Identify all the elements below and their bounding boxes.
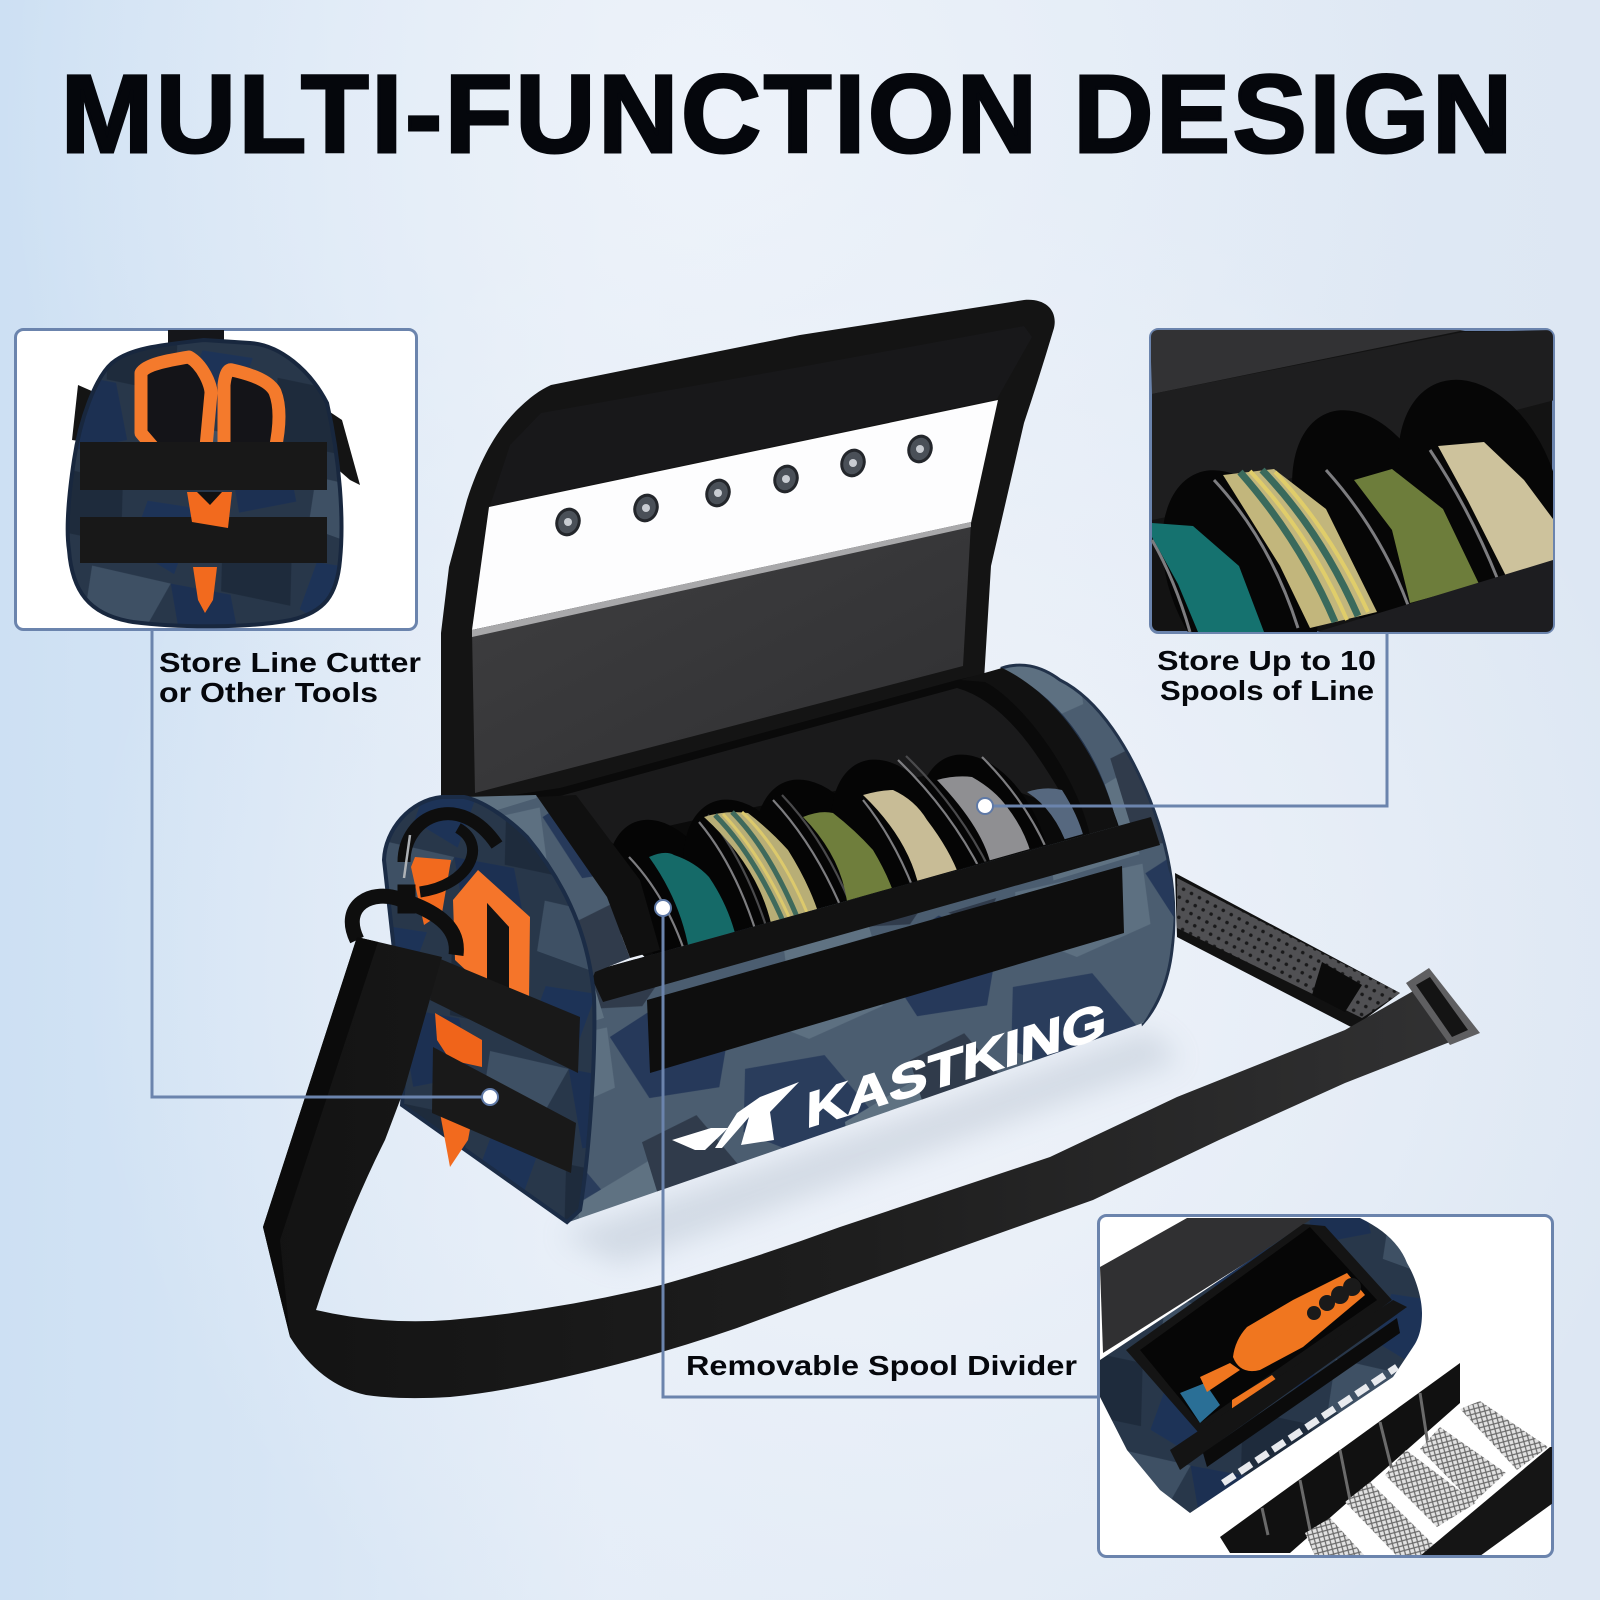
teal spool (649, 853, 736, 950)
label: store up to 10 spools: Store Up to 10 (1157, 645, 1376, 676)
spool flange rings (629, 756, 1047, 950)
beige spool (863, 790, 957, 881)
grey spool (937, 776, 1030, 860)
striped line (1223, 469, 1377, 628)
callout dots (482, 798, 993, 1105)
eyelets (553, 433, 935, 538)
green spool (803, 812, 892, 900)
logo wordmark: KASTKING (806, 992, 1107, 1139)
lip and velcro (1170, 1300, 1407, 1470)
panel: removable divider view (1098, 1216, 1553, 1556)
interior (1126, 1224, 1392, 1440)
right rim band (960, 668, 1118, 835)
logo mark (672, 1082, 799, 1150)
brand logo (672, 992, 1107, 1150)
open lid (441, 300, 1055, 800)
bag floor shadow (560, 1030, 1180, 1265)
right end cap (1002, 665, 1174, 1023)
label: store line cutter: or Other Tools (159, 677, 378, 708)
divider (1220, 1363, 1553, 1556)
green line (1354, 469, 1479, 603)
scissors handles (140, 355, 279, 450)
bag body (1100, 1218, 1422, 1513)
tool holder straps (430, 958, 580, 1173)
side clips (72, 385, 360, 485)
teal line (1152, 523, 1264, 632)
label: store line cutter: Store Line Cutter (159, 647, 421, 678)
line cutter tool (411, 857, 530, 1167)
label: store up to 10 spools: Spools of Line (1160, 675, 1374, 706)
label: removable spool divider: Removable Spool Divider (686, 1350, 1077, 1381)
orange tools (1200, 1273, 1365, 1415)
flanges (1164, 380, 1553, 632)
holder straps (80, 442, 327, 490)
front panel camo (569, 817, 1174, 1222)
main product: fishing line spool bag (263, 300, 1480, 1398)
blade (187, 492, 232, 613)
callout lines (152, 630, 1387, 1397)
spools of line (614, 754, 1083, 946)
blue card (1180, 1383, 1220, 1423)
label: store line cutter (159, 647, 421, 708)
left rim band (536, 795, 660, 958)
title: MULTI-FUNCTION DESIGN (61, 53, 1515, 176)
striped multicolour spool (704, 812, 820, 933)
lid lower inner panel (472, 522, 971, 793)
left end cap (384, 797, 594, 1222)
label: store up to 10 spools (1157, 645, 1376, 706)
panel: tool pocket close-up (16, 329, 416, 630)
lid velcro strip (490, 326, 1032, 506)
swivel hook hardware (352, 814, 497, 955)
bag opening interior (480, 670, 1120, 962)
shoulder strap (263, 937, 1455, 1398)
front lip (1310, 560, 1555, 634)
left end camo rim (464, 795, 630, 985)
end cap body (68, 340, 341, 626)
beige line (1438, 442, 1553, 578)
velcro strip (647, 866, 1124, 1073)
lid white band with eyelets (472, 400, 998, 630)
rear shoulder pad (1175, 873, 1400, 1028)
open lid (1100, 1218, 1317, 1353)
blue spool (1027, 788, 1083, 840)
printed logo (1223, 1367, 1397, 1483)
tool ring holes (1307, 1278, 1361, 1320)
top handle (168, 330, 224, 342)
panel: spools close-up (1149, 328, 1555, 634)
strap slider buckle (1406, 968, 1480, 1045)
